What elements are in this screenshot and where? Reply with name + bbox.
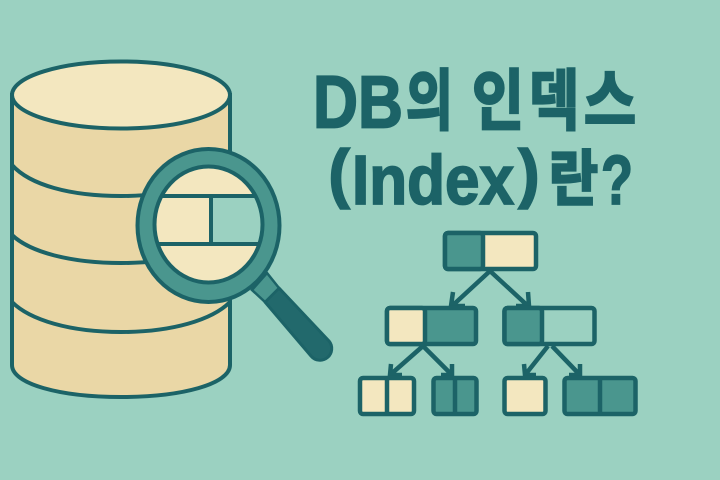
node: leaf 2 [434,378,476,414]
icon: database cylinder [12,62,230,397]
title: 인 [472,48,524,144]
title: 스 [584,48,636,144]
arrows: tree connections [390,271,580,375]
node: leaf 3 [504,378,546,414]
title: 란 [549,131,598,218]
title: 덱 [529,48,579,144]
node: root [445,233,536,269]
node: middle right [504,308,594,344]
icon: magnifying glass [138,149,332,360]
title: ( [329,137,350,209]
diagram: B-tree index [360,233,636,414]
title: DB [313,60,403,144]
title: 의 [406,48,453,144]
node: middle left [387,308,476,344]
title: Index [352,141,514,219]
title: ? [601,141,633,219]
node: leaf 1 [360,378,414,414]
title [313,48,636,219]
title: ) [519,137,539,209]
node: leaf 4 [564,378,636,414]
